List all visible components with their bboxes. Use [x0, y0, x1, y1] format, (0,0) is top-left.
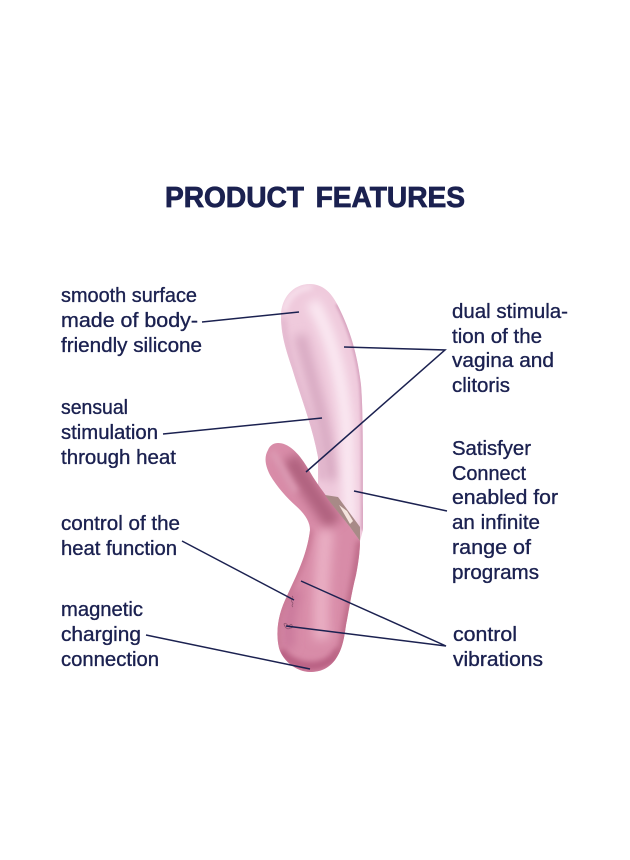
- label: control vibrations: vibrations: [453, 649, 543, 671]
- label: connect: programs: [452, 562, 539, 584]
- label: dual stimulation: [452, 301, 568, 397]
- label: heat: [61, 397, 176, 469]
- label: connect: enabled for: [452, 487, 558, 509]
- label: charging: connection: [61, 649, 159, 671]
- label: connect: range of: [452, 537, 531, 559]
- callout line: silicone: [202, 312, 299, 322]
- label: silicone: made of body-: [61, 310, 198, 332]
- label: connect: Satisfyer: [452, 438, 531, 460]
- label: dual stimulation: clitoris: [452, 375, 510, 397]
- label: control vibrations: control: [453, 624, 517, 646]
- label: heat: through heat: [61, 447, 176, 469]
- label: silicone: [61, 285, 202, 357]
- label: silicone: friendly silicone: [61, 335, 202, 357]
- callout line: charging: [146, 635, 310, 669]
- callout line: heat control: [182, 541, 294, 600]
- label: connect: an infinite: [452, 512, 540, 534]
- control icon: heat: [292, 596, 293, 607]
- label: heat: stimulation: [61, 422, 158, 444]
- band highlight: [339, 505, 353, 524]
- callout lines: dual stimulation: [306, 347, 445, 472]
- callout line: connect: [354, 491, 447, 511]
- label: heat control: heat function: [61, 538, 177, 560]
- title: PRODUCT FEATURES: [165, 182, 465, 214]
- label: heat: sensual: [61, 397, 128, 419]
- lower body and clitoral arm: [266, 443, 360, 672]
- label: connect: Connect: [452, 463, 526, 485]
- label: dual stimulation: vagina and: [452, 350, 554, 372]
- label: dual stimulation: tion of the: [452, 326, 542, 348]
- label: charging: [61, 599, 159, 671]
- control icon: vibration: [284, 623, 292, 629]
- label: heat control: control of the: [61, 513, 180, 535]
- label: charging: magnetic: [61, 599, 143, 621]
- label: heat control: [61, 513, 180, 560]
- label: connect: [452, 438, 558, 584]
- label: dual stimulation: dual stimula-: [452, 301, 568, 323]
- upper shaft: [281, 284, 363, 540]
- label: silicone: smooth surface: [61, 285, 197, 307]
- label: control vibrations: [453, 624, 543, 671]
- callout line: heat: [163, 418, 322, 434]
- label: charging: charging: [61, 624, 141, 646]
- metallic band: [325, 495, 360, 541]
- callout lines: control vibrations: [286, 581, 446, 646]
- product illustration: [266, 284, 363, 672]
